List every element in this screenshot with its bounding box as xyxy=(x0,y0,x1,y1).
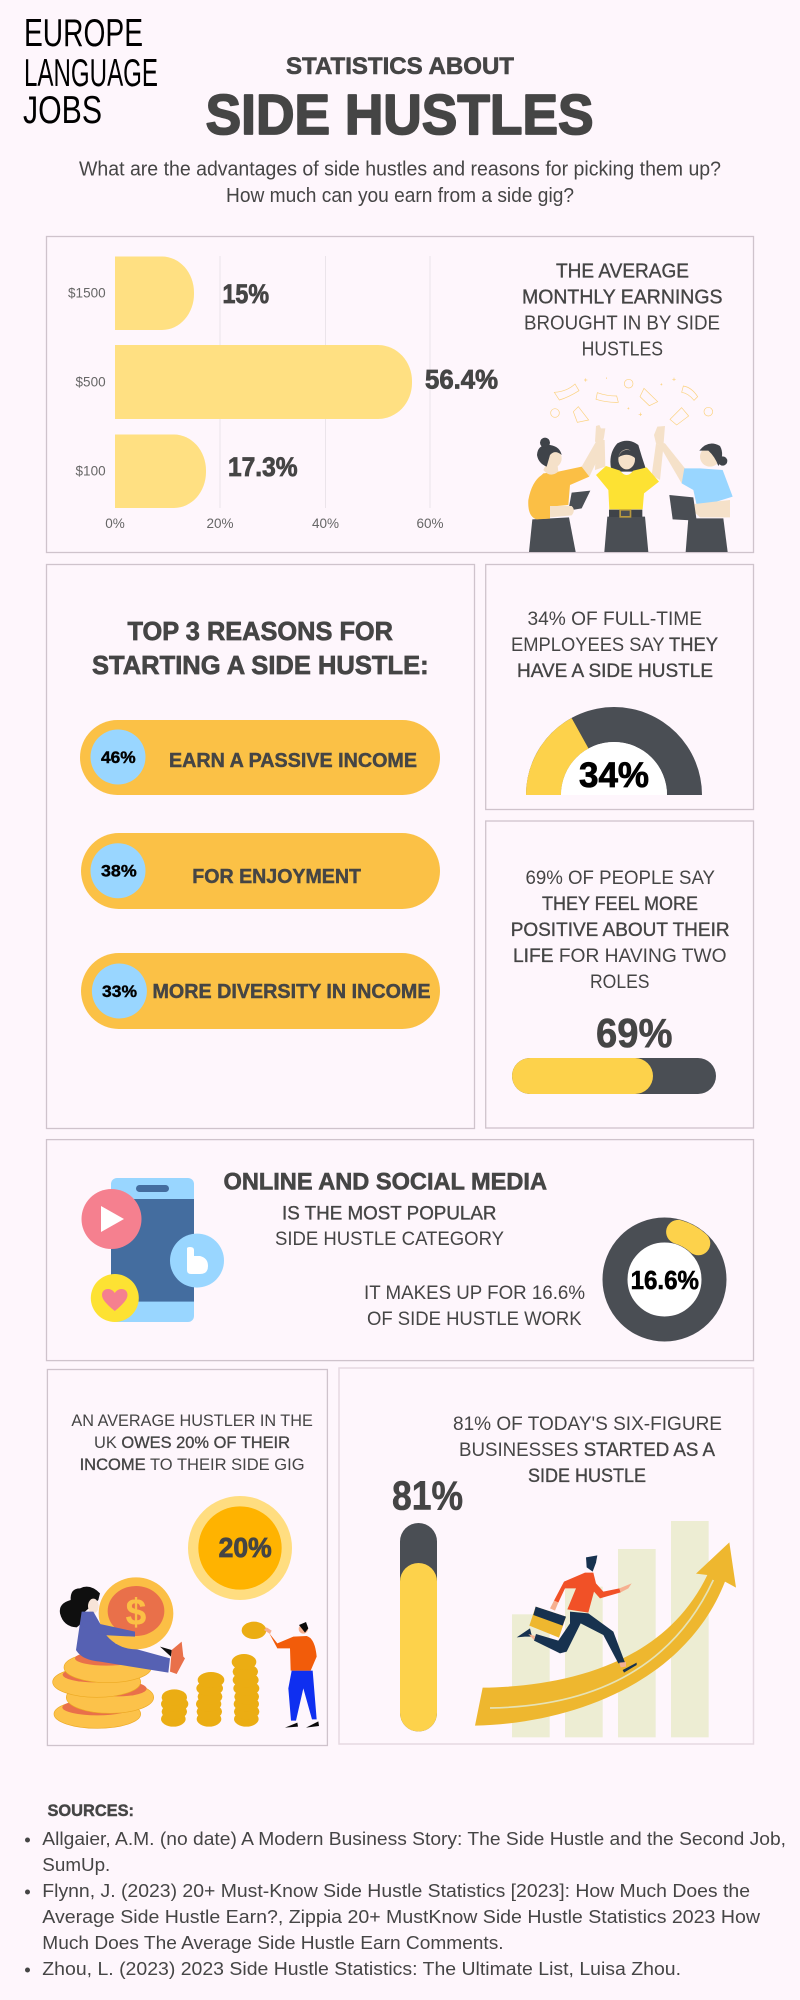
illustration: three women high-fiving under falling money xyxy=(528,377,733,552)
panel: 69% feel more positive xyxy=(486,821,754,1128)
text: online and social media: ONLINE AND SOCIAL MEDIA xyxy=(224,1168,547,1196)
coin badge: 20% xyxy=(188,1496,292,1600)
heading: top 3 reasons xyxy=(92,616,429,680)
progress bar: 69%: 69% xyxy=(596,1010,672,1056)
bar chart: monthly earnings: 17.3% xyxy=(228,452,298,482)
reason pill: for enjoyment: 38% xyxy=(101,862,137,881)
text: 34% statement: 34% OF FULL-TIME xyxy=(528,609,702,630)
thermometer gauge: 81% xyxy=(392,1473,463,1732)
bar chart: monthly earnings: 20% xyxy=(206,516,234,531)
sources: Allgaier, A.M. (no date) A Modern Business Story: The Side Hustle and the Second Job, xyxy=(42,1829,786,1849)
text: online and social media: SIDE HUSTLE CATEGORY xyxy=(275,1229,504,1250)
sources: Flynn, J. (2023) 20+ Must-Know Side Hustle Statistics [2023]: How Much Does the xyxy=(42,1881,750,1901)
text: 69% statement: POSITIVE ABOUT THEIR xyxy=(511,920,730,941)
text: online and social media xyxy=(224,1168,585,1330)
donut chart: 16.6% xyxy=(615,1230,714,1329)
thermometer gauge: 81%: 81% xyxy=(392,1473,463,1519)
bar chart: monthly earnings: 0% xyxy=(105,516,125,531)
logo: Europe Language Jobs xyxy=(23,12,158,132)
title xyxy=(206,53,594,147)
panel: online and social media xyxy=(46,1140,754,1361)
text: 34% statement: EMPLOYEES SAY THEY xyxy=(511,635,718,656)
text: 81% statement: SIDE HUSTLE xyxy=(528,1466,646,1487)
sources: Zhou, L. (2023) 2023 Side Hustle Statistics: The Ultimate List, Luisa Zhou. xyxy=(42,1959,681,1979)
reason pill: earn a passive income: 46% xyxy=(101,748,136,767)
coin badge: 20%: 20% xyxy=(219,1532,272,1563)
icon: phone with social icons xyxy=(82,1178,224,1322)
subtitle xyxy=(79,158,721,207)
gauge: 34% xyxy=(526,707,702,795)
panel: top 3 reasons xyxy=(46,564,474,1128)
text: 81% statement xyxy=(453,1414,722,1487)
panel: average monthly earnings xyxy=(46,236,754,552)
bar chart: monthly earnings: $1500 xyxy=(68,286,106,300)
illustration: woman on coin stack and man stacking coins: $ xyxy=(126,1591,146,1632)
heading: top 3 reasons: STARTING A SIDE HUSTLE: xyxy=(92,650,429,680)
text: UK hustler statement xyxy=(71,1411,313,1474)
heading: average monthly earnings: MONTHLY EARNINGS xyxy=(522,286,722,308)
text: 69% statement: ROLES xyxy=(590,972,650,993)
bar chart: monthly earnings: 56.4% xyxy=(425,364,498,394)
text: 69% statement: THEY FEEL MORE xyxy=(542,894,698,915)
bar chart: monthly earnings xyxy=(68,256,498,531)
text: UK hustler statement: INCOME TO THEIR SIDE GIG xyxy=(80,1455,305,1474)
sources: SOURCES: xyxy=(48,1801,134,1820)
subtitle: What are the advantages of side hustles and reasons for picking them up? xyxy=(79,158,721,180)
gauge: 34%: 34% xyxy=(579,756,649,795)
text: UK hustler statement: UK OWES 20% OF THEIR xyxy=(94,1433,290,1452)
sources: SumUp. xyxy=(42,1855,110,1875)
text: 69% statement xyxy=(511,868,730,993)
text: online and social media: IS THE MOST POPULAR xyxy=(282,1204,496,1224)
donut chart: 16.6%: 16.6% xyxy=(631,1265,699,1295)
heading: average monthly earnings xyxy=(522,260,722,360)
bar chart: monthly earnings: 40% xyxy=(312,516,339,531)
logo: Europe Language Jobs: JOBS xyxy=(23,89,102,132)
heading: average monthly earnings: BROUGHT IN BY SIDE xyxy=(524,312,720,334)
sources xyxy=(25,1801,786,1979)
bar chart: monthly earnings: 15% xyxy=(222,279,269,309)
text: UK hustler statement: AN AVERAGE HUSTLER IN THE xyxy=(71,1411,313,1430)
title: STATISTICS ABOUT xyxy=(286,53,514,80)
illustration: woman on coin stack and man stacking coins xyxy=(53,1577,319,1728)
text: 81% statement: BUSINESSES STARTED AS A xyxy=(459,1440,715,1461)
bar chart: monthly earnings: $500 xyxy=(76,374,106,390)
text: 69% statement: LIFE FOR HAVING TWO xyxy=(513,946,726,967)
panel: 34% of full-time employees xyxy=(486,564,754,810)
reason pill: more diversity in income xyxy=(81,953,440,1029)
reason pill: earn a passive income xyxy=(80,720,440,795)
panel: average hustler in the UK xyxy=(47,1370,327,1746)
text: 34% statement: HAVE A SIDE HUSTLE xyxy=(517,661,713,682)
logo: Europe Language Jobs: EUROPE xyxy=(24,12,143,55)
reason pill: earn a passive income: EARN A PASSIVE INCOME xyxy=(169,750,417,772)
progress bar: 69% xyxy=(512,1010,716,1094)
reason pill: for enjoyment xyxy=(81,833,440,909)
panel: 81% of six-figure businesses xyxy=(339,1368,754,1744)
text: 81% statement: 81% OF TODAY'S SIX-FIGURE xyxy=(453,1414,722,1435)
text: online and social media: OF SIDE HUSTLE WORK xyxy=(367,1309,582,1330)
text: 34% statement xyxy=(511,609,718,682)
reason pill: for enjoyment: FOR ENJOYMENT xyxy=(192,866,361,888)
subtitle: How much can you earn from a side gig? xyxy=(226,185,574,207)
text: 69% statement: 69% OF PEOPLE SAY xyxy=(526,868,715,889)
heading: top 3 reasons: TOP 3 REASONS FOR xyxy=(128,616,393,646)
logo: Europe Language Jobs: LANGUAGE xyxy=(24,52,158,95)
sources: Average Side Hustle Earn?, Zippia 20+ MustKnow Side Hustle Statistics 2023 How xyxy=(42,1907,761,1927)
heading: average monthly earnings: THE AVERAGE xyxy=(556,260,689,282)
sources: Much Does The Average Side Hustle Earn Comments. xyxy=(42,1933,504,1953)
bar chart: monthly earnings: 60% xyxy=(416,516,444,531)
reason pill: more diversity in income: 33% xyxy=(102,982,137,1001)
text: online and social media: IT MAKES UP FOR 16.6% xyxy=(364,1283,585,1304)
reason pill: more diversity in income: MORE DIVERSITY IN INCOME xyxy=(152,981,430,1003)
title: SIDE HUSTLES xyxy=(206,83,594,147)
heading: average monthly earnings: HUSTLES xyxy=(582,338,663,360)
illustration: man running up rising arrow xyxy=(475,1521,736,1737)
bar chart: monthly earnings: $100 xyxy=(76,464,106,478)
